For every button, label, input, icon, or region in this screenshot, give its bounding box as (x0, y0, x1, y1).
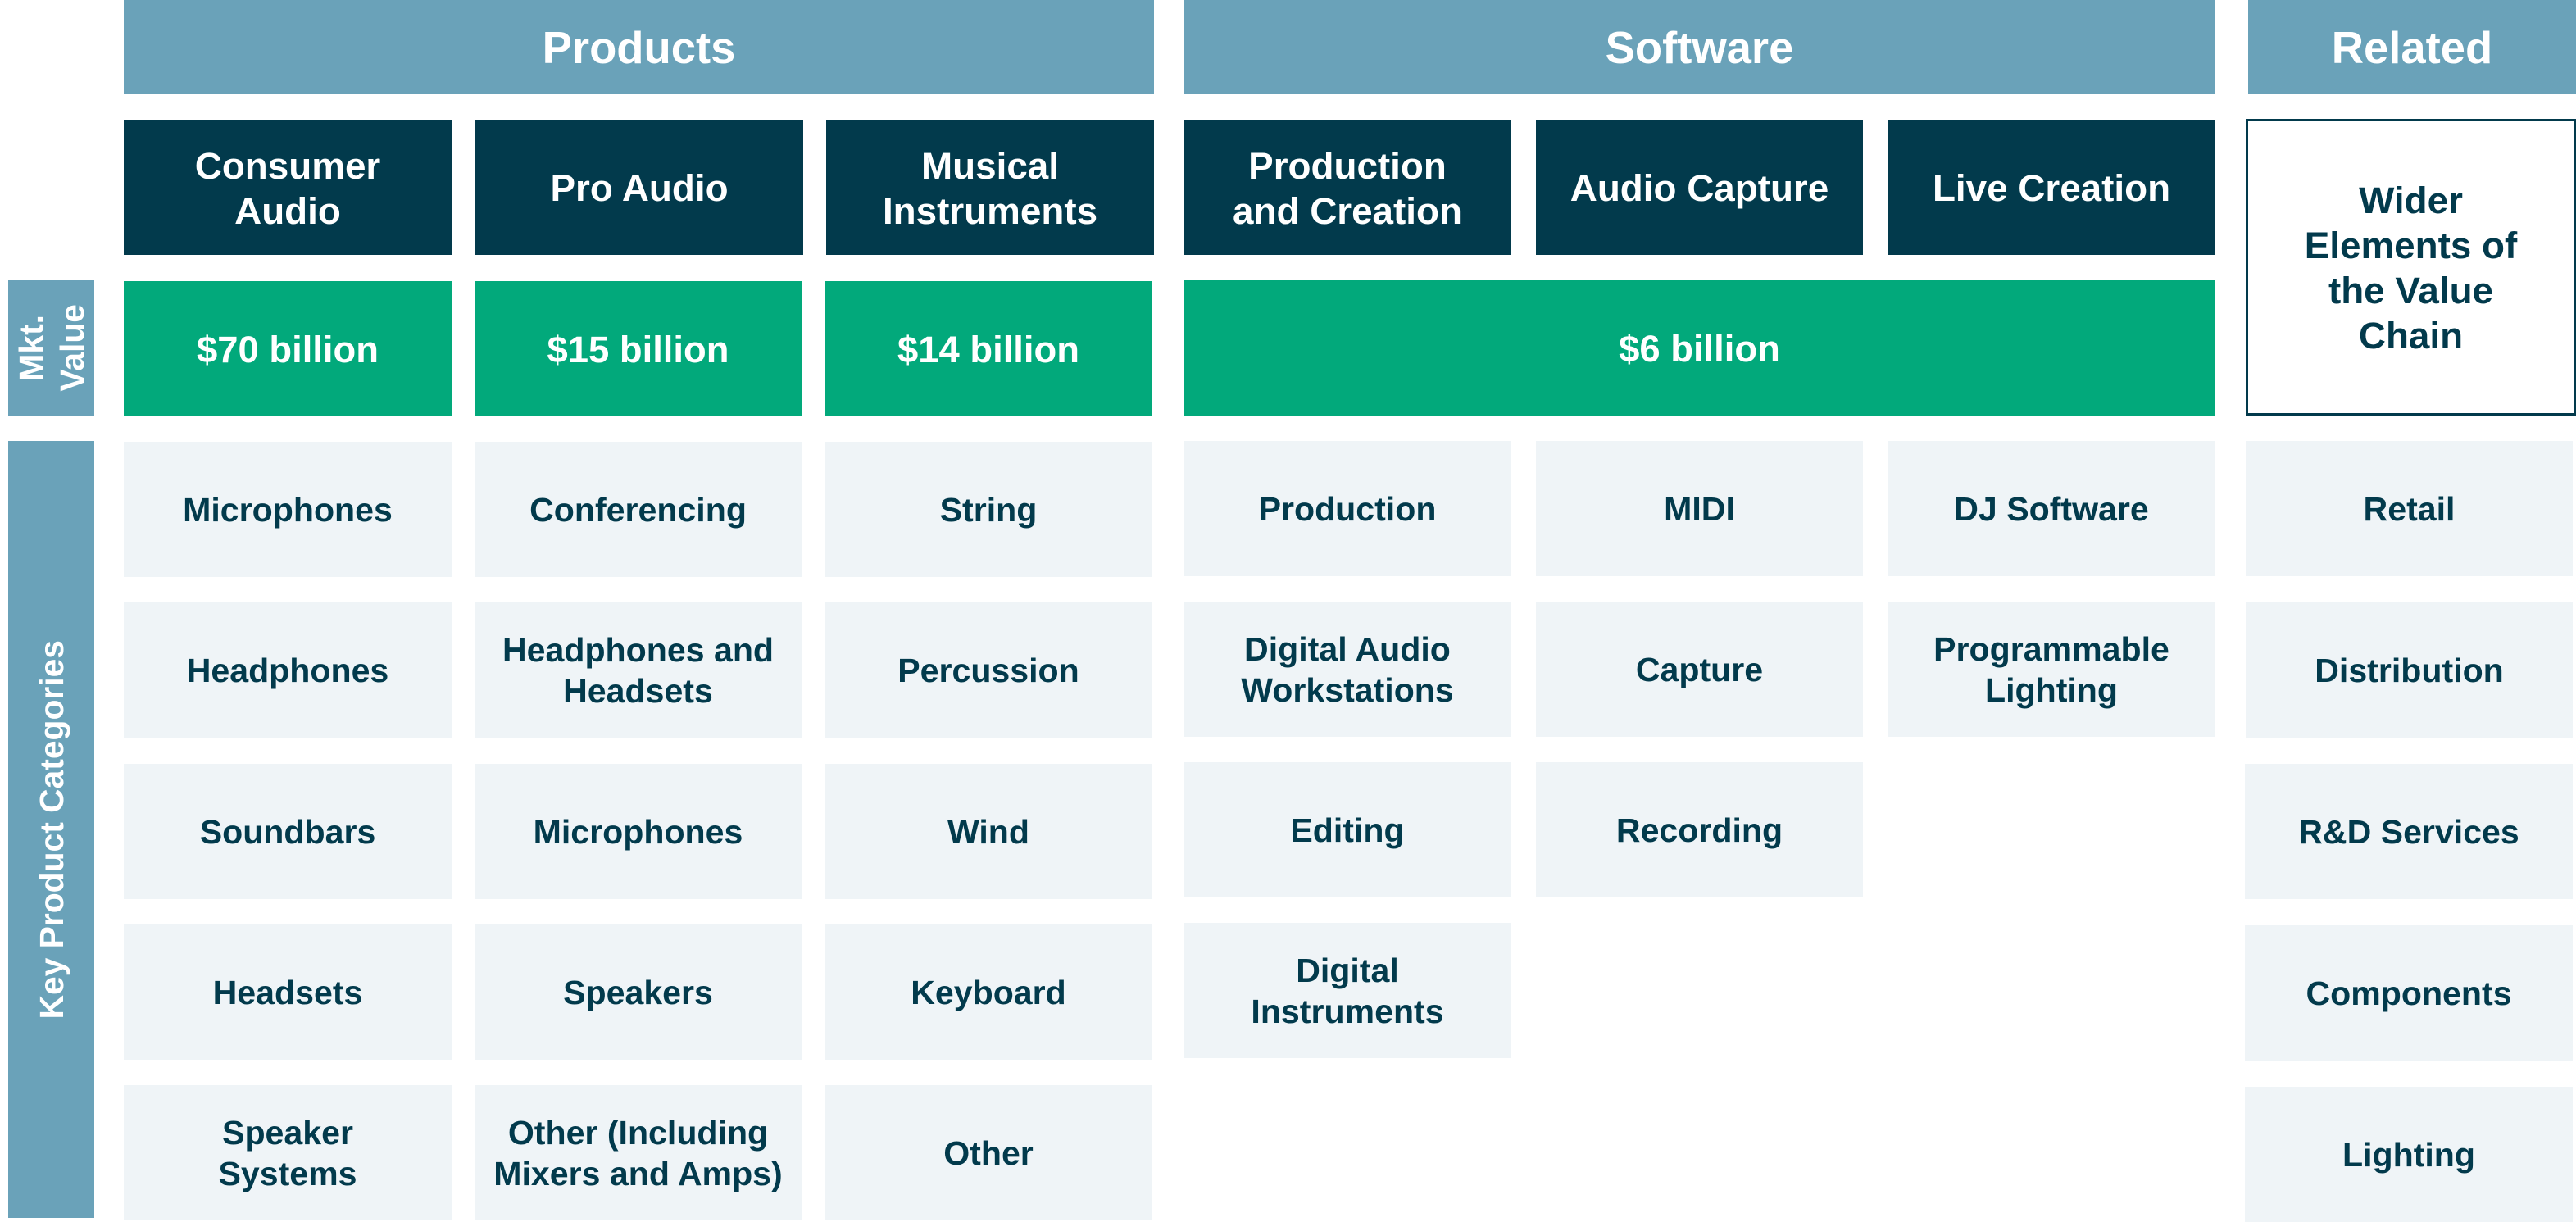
category: Programmable Lighting: Programmable (1933, 629, 2169, 667)
category: Headphones and Headsets (475, 602, 802, 738)
category: Keyboard: Keyboard (911, 974, 1066, 1011)
market value: musical instruments: $14 billion (897, 329, 1079, 370)
category: Speaker Systems: Speaker (222, 1113, 353, 1151)
category: Digital Audio Workstations: Digital Audio (1244, 629, 1451, 667)
category: Headphones and Headsets: Headphones and (502, 631, 774, 669)
heading: Products: Products (543, 23, 735, 72)
category: Headphones: Headphones (187, 651, 388, 688)
category: MIDI (1536, 441, 1863, 576)
category: Other (825, 1085, 1152, 1220)
category: Keyboard (825, 924, 1152, 1060)
category: String (825, 442, 1152, 577)
market value: pro audio (475, 281, 802, 416)
column heading: Consumer Audio: Audio (234, 190, 341, 231)
category: Microphones (475, 764, 802, 899)
category: Percussion: Percussion (897, 651, 1079, 688)
category: Soundbars: Soundbars (200, 813, 375, 851)
category: Headsets (124, 924, 452, 1060)
column heading: Live Creation: Live Creation (1933, 167, 2170, 209)
category: Other (Including Mixers and Amps): Mixers and Amps) (493, 1154, 783, 1192)
column heading: Production and Creation: and Creation (1233, 190, 1462, 231)
column heading: Audio Capture (1536, 120, 1863, 255)
category: Speakers: Speakers (563, 974, 713, 1011)
category: Headsets: Headsets (213, 974, 362, 1011)
category: Other (Including Mixers and Amps): Other (Including (508, 1113, 768, 1151)
category: Conferencing: Conferencing (529, 490, 747, 528)
category: Other (Including Mixers and Amps) (475, 1085, 802, 1220)
market value: musical instruments (825, 281, 1152, 416)
category: Conferencing (475, 442, 802, 577)
panel: wider elements of the value chain: the Value (2328, 270, 2493, 311)
category: Distribution: Distribution (2315, 651, 2504, 688)
category: Capture (1536, 602, 1863, 737)
column: pro audio categories (475, 442, 802, 1220)
category: Headphones and Headsets: Headsets (563, 672, 713, 710)
panel: wider elements of the value chain: Chain (2359, 315, 2463, 357)
category: Lighting (2245, 1087, 2573, 1222)
heading: Software (1184, 0, 2215, 94)
side label: key product categories (8, 441, 94, 1218)
column heading: Consumer Audio: Consumer (195, 145, 380, 187)
market value: software: $6 billion (1619, 328, 1780, 370)
category: Capture: Capture (1636, 651, 1763, 688)
heading: Related: Related (2332, 23, 2492, 72)
column heading: Musical Instruments: Musical (921, 145, 1059, 187)
category: Recording: Recording (1616, 811, 1783, 849)
column heading: Pro Audio: Pro Audio (550, 167, 729, 209)
category: Digital Instruments: Instruments (1251, 992, 1444, 1029)
panel: wider elements of the value chain (2246, 119, 2576, 416)
category: Editing: Editing (1290, 811, 1405, 849)
category: DJ Software: DJ Software (1954, 490, 2149, 528)
column: live creation categories (1888, 441, 2215, 737)
category: Retail: Retail (2364, 490, 2455, 528)
column heading: Musical Instruments: Instruments (883, 190, 1097, 231)
category: Speaker Systems (124, 1085, 452, 1220)
category: Digital Audio Workstations (1184, 602, 1511, 737)
category: Components: Components (2306, 974, 2512, 1011)
category: Wind (825, 764, 1152, 899)
category: Microphones (124, 442, 452, 577)
category: Recording (1536, 762, 1863, 897)
category: Headphones (124, 602, 452, 738)
column: audio capture categories (1536, 441, 1863, 897)
category: MIDI: MIDI (1664, 490, 1735, 528)
category: Retail (2246, 441, 2573, 576)
panel: wider elements of the value chain: Elements of (2305, 225, 2517, 266)
category: Production (1184, 441, 1511, 576)
category: String: String (940, 490, 1037, 528)
column heading: Production and Creation (1184, 120, 1511, 255)
category: Percussion (825, 602, 1152, 738)
heading: Related (2248, 0, 2576, 94)
category: Editing (1184, 762, 1511, 897)
column: related categories (2245, 441, 2573, 1222)
side label: key product categories: Key Product Categories (33, 640, 70, 1019)
category: Speaker Systems: Systems (218, 1154, 357, 1192)
market value: consumer audio (124, 281, 452, 416)
side label: market value: Value (52, 304, 90, 392)
column: production and creation categories (1184, 441, 1511, 1058)
side label: market value (8, 280, 94, 416)
category: Digital Instruments: Digital (1296, 951, 1399, 988)
column heading: Audio Capture: Audio Capture (1570, 167, 1829, 209)
side label: market value: Mkt. (11, 315, 49, 381)
column: consumer audio categories (124, 442, 452, 1220)
category: Soundbars (124, 764, 452, 899)
category: R&D Services (2245, 764, 2573, 899)
market value: software (1184, 280, 2215, 416)
panel: wider elements of the value chain: Wider (2359, 179, 2463, 221)
category: Components (2245, 925, 2573, 1061)
category: Microphones: Microphones (534, 813, 743, 851)
category: Microphones: Microphones (183, 490, 393, 528)
category: DJ Software (1888, 441, 2215, 576)
column heading: Live Creation (1888, 120, 2215, 255)
category: Lighting: Lighting (2342, 1136, 2475, 1174)
category: R&D Services: R&D Services (2298, 813, 2519, 851)
category: Digital Audio Workstations: Workstations (1241, 670, 1454, 708)
category: Distribution (2246, 602, 2573, 738)
category: Digital Instruments (1184, 923, 1511, 1058)
column heading: Consumer Audio (124, 120, 452, 255)
category: Other: Other (943, 1134, 1034, 1172)
heading: Software: Software (1606, 23, 1793, 72)
category: Programmable Lighting (1888, 602, 2215, 737)
category: Production: Production (1259, 490, 1436, 528)
column heading: Pro Audio (475, 120, 803, 255)
category: Speakers (475, 924, 802, 1060)
heading: Products (124, 0, 1154, 94)
market value: pro audio: $15 billion (547, 329, 729, 370)
column heading: Production and Creation: Production (1248, 145, 1447, 187)
column: musical instruments categories (825, 442, 1152, 1220)
column heading: Musical Instruments (826, 120, 1154, 255)
category: Wind: Wind (947, 813, 1029, 851)
category: Programmable Lighting: Lighting (1985, 670, 2118, 708)
market value: consumer audio: $70 billion (197, 329, 379, 370)
